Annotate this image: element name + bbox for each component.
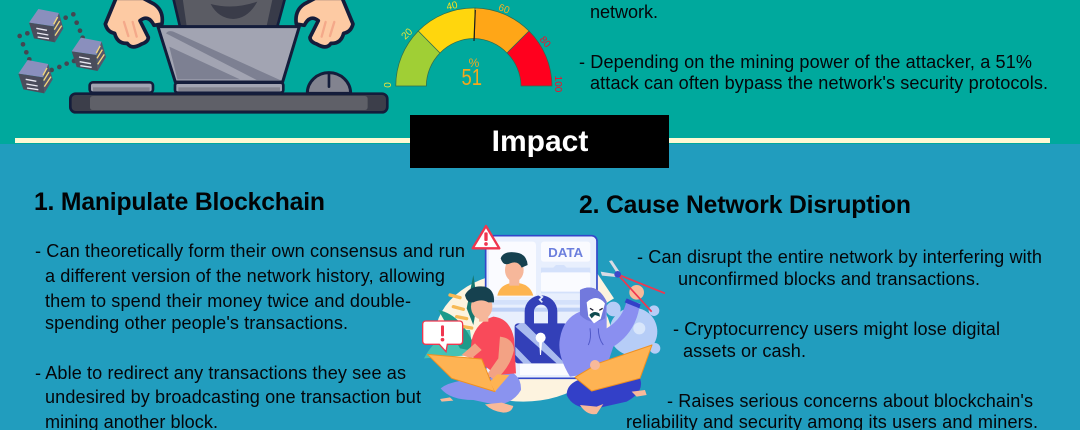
text block: top right notes <box>579 2 1048 93</box>
icon: warning triangle <box>473 226 499 248</box>
gauge chart: 51 percent: 0 <box>383 82 394 88</box>
text block: 2. Cause Network Disruption: - Raises serious concerns about blockchain's <box>667 391 1033 411</box>
divider line <box>15 138 1050 143</box>
icon: hacker at laptop illustration <box>17 0 387 112</box>
gauge chart: 51 percent: 40 <box>446 0 459 13</box>
gauge chart: 51 percent: % <box>469 56 480 70</box>
data panel <box>486 236 597 378</box>
skull <box>606 302 660 356</box>
icon: alert speech bubble <box>423 321 463 352</box>
right hand <box>296 0 353 47</box>
keyboard <box>90 82 153 93</box>
text block: 1. Manipulate Blockchain: spending other people's transactions. <box>45 313 348 333</box>
text block: top right notes: - Depending on the mining power of the attacker, a 51% <box>579 52 1032 72</box>
hacker torso <box>173 0 285 27</box>
text block: 2. Cause Network Disruption: assets or cash. <box>683 341 806 361</box>
text block: 1. Manipulate Blockchain: - Can theoretically form their own consensus and run <box>35 241 465 261</box>
desk <box>70 94 387 112</box>
text block: top right notes: attack can often bypass the network's security protocols. <box>590 73 1048 93</box>
backdrop circle <box>435 270 614 402</box>
text block: 1. Manipulate Blockchain <box>34 189 465 430</box>
text block: 2. Cause Network Disruption: - Cryptocurrency users might lose digital <box>673 319 1000 339</box>
left hand <box>105 0 162 47</box>
heading: Impact: Impact <box>492 125 588 158</box>
illustration: hacker attack on user data <box>423 226 665 414</box>
gauge chart: 51 percent: 20 <box>400 26 415 42</box>
text block: 2. Cause Network Disruption: 2. Cause Network Disruption <box>579 192 911 219</box>
mouse <box>307 73 351 93</box>
text block: 1. Manipulate Blockchain: undesired by broadcasting one transaction but <box>45 387 421 407</box>
text block: 1. Manipulate Blockchain: them to spend their money twice and double- <box>45 291 411 311</box>
hacker laptop <box>575 345 652 391</box>
gauge chart: 51 percent: 60 <box>497 2 511 17</box>
plant <box>424 275 477 358</box>
portrait on panel <box>497 252 533 296</box>
victim figure <box>440 286 521 413</box>
gauge chart: 51 percent: 51 <box>462 64 482 90</box>
text block: 2. Cause Network Disruption <box>579 192 1042 430</box>
victim laptop <box>427 354 509 392</box>
panel: upper teal section <box>0 0 1080 144</box>
gauge chart: 51 percent: 100 <box>552 76 563 93</box>
text block: 2. Cause Network Disruption: unconfirmed blocks and transactions. <box>678 269 980 289</box>
data panel: DATA <box>548 245 584 260</box>
panel: impact section background <box>0 144 1080 430</box>
hacker figure <box>559 285 647 414</box>
icon: broken padlock <box>515 294 567 363</box>
gauge chart: 51 percent: 80 <box>537 35 553 50</box>
icon: red cutters <box>601 260 665 312</box>
text block: 1. Manipulate Blockchain: - Able to redirect any transactions they see as <box>35 363 406 383</box>
text block: 1. Manipulate Blockchain: 1. Manipulate Blockchain <box>34 189 325 216</box>
heading: Impact <box>410 115 669 168</box>
text block: top right notes: network. <box>590 2 658 22</box>
text block: 1. Manipulate Blockchain: a different version of the network history, allowing <box>45 266 445 286</box>
gauge chart: 51 percent <box>383 0 563 93</box>
text block: 2. Cause Network Disruption: - Can disrupt the entire network by interfering with <box>637 247 1042 267</box>
laptop <box>158 27 299 93</box>
icon: blockchain blocks <box>17 9 106 93</box>
